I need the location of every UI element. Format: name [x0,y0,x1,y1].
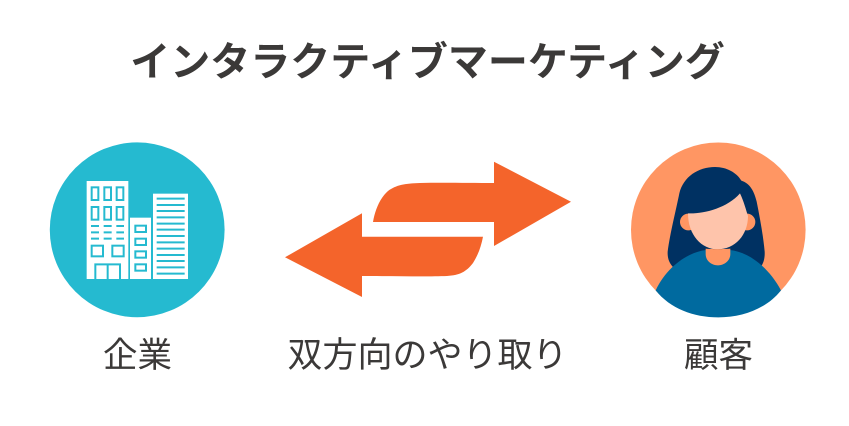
label: customer: 顧客 [684,337,753,375]
label: company: 企業 [103,337,172,375]
icon: customer portrait [631,142,806,317]
icon: two-way arrows [285,162,571,297]
icon: company buildings [50,142,225,317]
title: インタラクティブマーケティング [130,40,725,84]
label: two-way interaction: 双方向のやり取り [287,336,568,375]
